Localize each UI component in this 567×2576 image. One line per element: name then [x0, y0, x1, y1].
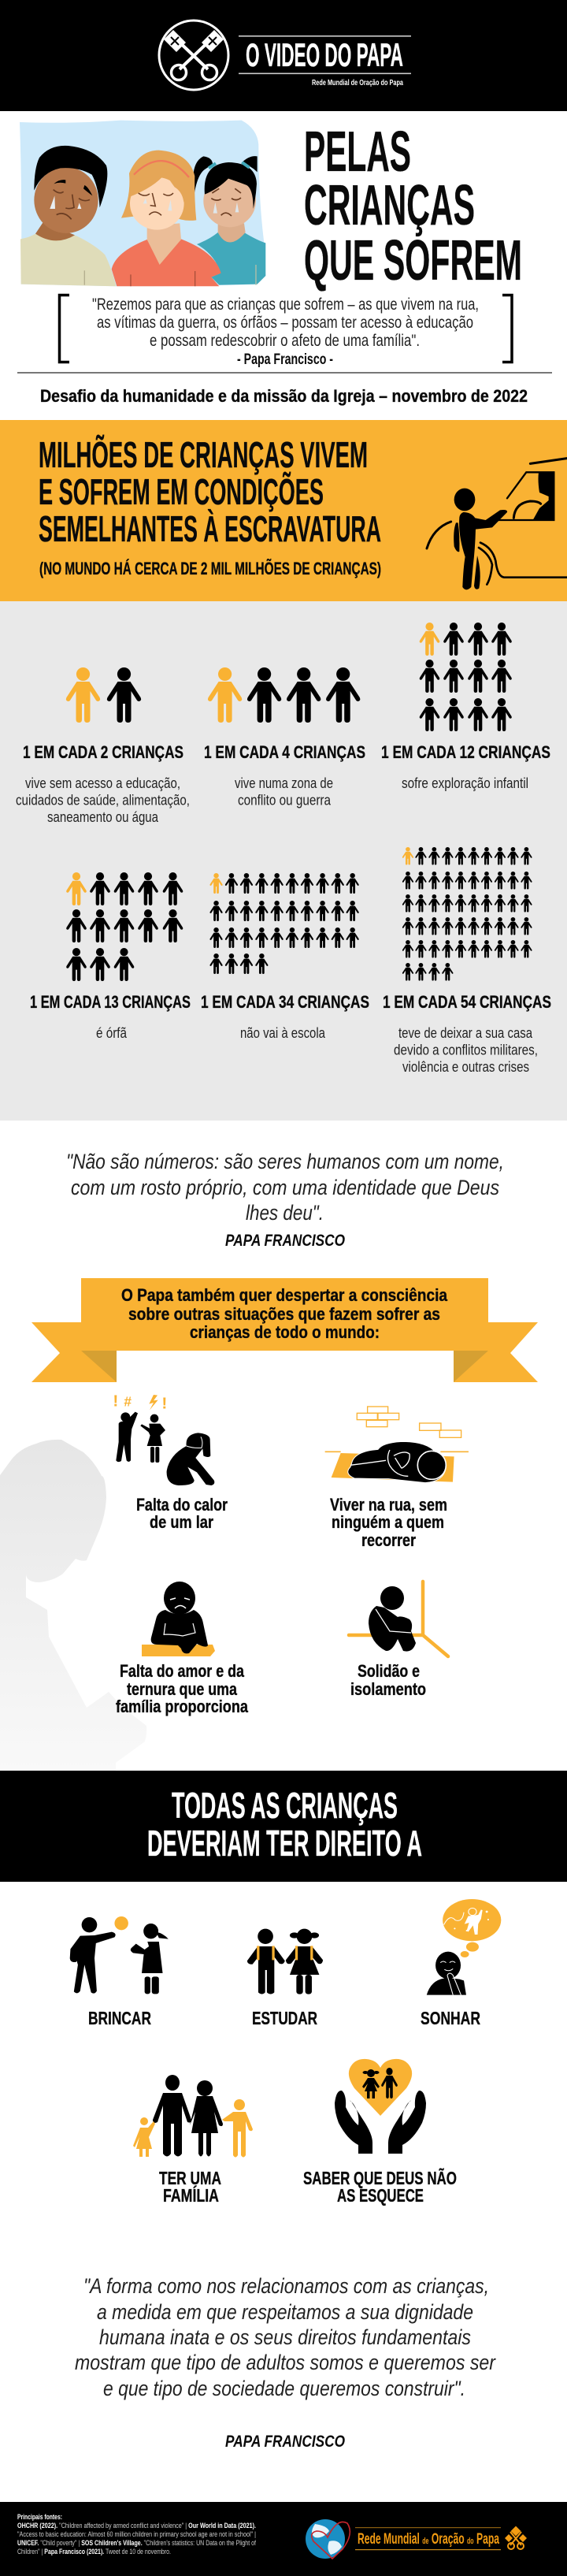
- stat: 1 in 4: [204, 667, 365, 808]
- heading: millions of children: E SOFREM EM CONDIÇÕES: [39, 471, 324, 512]
- prayer quote in brackets: - Papa Francisco -: [237, 351, 333, 368]
- pictogram: 34 children: [209, 873, 359, 974]
- illustration: three crying children: [20, 121, 265, 286]
- prayer quote in brackets: e possam redescobrir o afeto de uma família".: [150, 331, 420, 350]
- stat: 1 in 13: [30, 872, 191, 1041]
- right: dream: [421, 1899, 501, 2028]
- right: know God does not forget: SABER QUE DEUS NÃO: [303, 2167, 457, 2188]
- silhouette of the Pope: [0, 1440, 146, 1771]
- item: living on the street: Viver na rua, sem: [330, 1495, 447, 1515]
- icon: globe with heart: [306, 2519, 350, 2559]
- logo wordmark: [239, 35, 411, 87]
- icon: children with ball: [70, 1916, 169, 1994]
- closing quote: a medida em que respeitamos a sua dignidade: [97, 2300, 473, 2324]
- closing quote: humana inata e os seus direitos fundamentais: [99, 2325, 471, 2349]
- item: lack of family love: Falta do amor e da: [120, 1661, 245, 1681]
- stat: 1 in 2: vive sem acesso a educação,: [25, 775, 180, 791]
- prayer quote in brackets: [60, 295, 512, 368]
- icon: small keys: [505, 2527, 527, 2549]
- item: lack of family love: [116, 1582, 249, 1716]
- right: play: [70, 1916, 169, 2028]
- stat: 1 in 4: conflito ou guerra: [238, 791, 332, 808]
- sources: "Access to basic education: Almost 60 million children in primary school age are not in school" |: [17, 2530, 256, 2538]
- item: lack of home warmth: de um lar: [150, 1512, 213, 1532]
- right: family: TER UMA: [159, 2168, 221, 2188]
- panel: rights heading: [0, 1771, 567, 1882]
- icon: crossed keys logo: [159, 20, 228, 90]
- stat: 1 in 4: vive numa zona de: [235, 775, 333, 791]
- pictogram: 2 children: [66, 667, 141, 723]
- right: dream: SONHAR: [421, 2008, 480, 2028]
- sources: OHCHR (2022). "Children affected by armed conflict and violence" | Our World in Data (2021).: [17, 2522, 256, 2530]
- item: living on the street: [325, 1407, 469, 1550]
- panel: grey statistics: [0, 601, 567, 1121]
- closing quote: "A forma como nos relacionamos com as crianças,: [83, 2274, 489, 2298]
- sources: Principais fontes:: [17, 2513, 62, 2521]
- closing quote: [75, 2274, 496, 2451]
- icon: family holding hands: [133, 2075, 253, 2158]
- icon: arguing parents and child: [113, 1392, 214, 1485]
- sources: [17, 2513, 256, 2556]
- logo wordmark: Rede Mundial de Oração do Papa: [312, 79, 403, 87]
- network wordmark: Rede Mundial de Oração do Papa: [358, 2531, 499, 2548]
- sources: Children" | Papa Francisco (2021). Tweet de 10 de novembro.: [17, 2548, 171, 2556]
- stat: 1 in 54: violência e outras crises: [402, 1058, 529, 1075]
- stat: 1 in 12: [381, 623, 550, 791]
- stat: 1 in 54: devido a conflitos militares,: [394, 1042, 538, 1058]
- header band: [0, 0, 567, 111]
- banner: O Papa também quer despertar a consciência: [121, 1285, 448, 1305]
- right: play: BRINCAR: [88, 2008, 151, 2028]
- heading: millions of children: [39, 434, 381, 549]
- banner: crianças de todo o mundo:: [190, 1322, 380, 1342]
- right: study: [247, 1929, 323, 2028]
- item: lack of home warmth: [113, 1392, 228, 1532]
- right: study: ESTUDAR: [252, 2008, 317, 2028]
- icon: arguing parents and child: !: [113, 1392, 118, 1411]
- right: family: FAMÍLIA: [163, 2184, 219, 2206]
- icon: arguing parents and child: #: [124, 1394, 132, 1410]
- stat: 1 in 54: teve de deixar a sua casa: [398, 1024, 533, 1041]
- stat: 1 in 34: 1 EM CADA 34 CRIANÇAS: [201, 992, 369, 1012]
- logo wordmark: O VIDEO DO PAPA: [246, 36, 403, 73]
- closing quote: PAPA FRANCISCO: [225, 2433, 345, 2451]
- item: lack of family love: ternura que uma: [127, 1679, 238, 1699]
- stat: 1 in 13: 1 EM CADA 13 CRIANÇAS: [30, 992, 191, 1012]
- icon: child at car window: [427, 459, 567, 589]
- stat: 1 in 2: 1 EM CADA 2 CRIANÇAS: [23, 742, 183, 762]
- stat: 1 in 34: não vai à escola: [240, 1024, 326, 1041]
- right: know God does not forget: [303, 2059, 457, 2206]
- footer: [0, 2502, 567, 2576]
- icon: child sleeping on street: [325, 1407, 469, 1483]
- icon: child dreaming of astronaut: [427, 1899, 501, 1995]
- quote: not numbers: [66, 1150, 504, 1250]
- item: lack of family love: família proporciona: [116, 1697, 249, 1716]
- stat: 1 in 54: [383, 847, 551, 1075]
- divider: [17, 372, 552, 374]
- banner: sobre outras situações que fazem sofrer as: [128, 1304, 440, 1324]
- icon: child alone in corner: [349, 1582, 448, 1656]
- item: lack of home warmth: Falta do calor: [136, 1495, 228, 1515]
- item: loneliness: isolamento: [350, 1679, 426, 1699]
- sources: UNICEF. "Child poverty" | SOS Children's Village. "Children's statistics: UN Data on the Plight of: [17, 2539, 256, 2547]
- stat: 1 in 2: [16, 667, 190, 825]
- pictogram: 12 children: [420, 623, 512, 731]
- icon: arguing parents and child: !: [161, 1394, 167, 1412]
- stat: 1 in 34: [201, 873, 369, 1041]
- stat: 1 in 4: 1 EM CADA 4 CRIANÇAS: [204, 742, 365, 762]
- closing quote: e que tipo de sociedade queremos construir".: [103, 2377, 465, 2400]
- title: [304, 121, 522, 292]
- item: living on the street: recorrer: [361, 1530, 416, 1550]
- stat: 1 in 13: é órfã: [96, 1024, 128, 1041]
- subheading: (NO MUNDO HÁ CERCA DE 2 MIL MILHÕES DE CRIANÇAS): [39, 559, 381, 578]
- closing quote: mostram que tipo de adultos somos e queremos ser: [75, 2351, 496, 2374]
- icon: hands holding heart with children: [335, 2059, 426, 2154]
- right: family: [133, 2075, 253, 2206]
- panel: orange headline: [0, 420, 567, 601]
- icon: children with backpacks: [247, 1929, 323, 1994]
- item: loneliness: [349, 1582, 448, 1699]
- banner: [32, 1278, 538, 1382]
- item: living on the street: ninguém a quem: [332, 1512, 444, 1532]
- pictogram: 54 children: [402, 847, 532, 980]
- stat: 1 in 2: cuidados de saúde, alimentação,: [16, 791, 190, 808]
- right: know God does not forget: AS ESQUECE: [337, 2185, 424, 2206]
- quote: not numbers: lhes deu".: [246, 1201, 324, 1225]
- panel: rights heading: TODAS AS CRIANÇAS: [172, 1785, 398, 1826]
- stat: 1 in 2: saneamento ou água: [47, 808, 159, 825]
- icon: sad child at table: [142, 1582, 215, 1656]
- pictogram: 13 children: [66, 872, 183, 981]
- stat: 1 in 12: sofre exploração infantil: [402, 775, 528, 791]
- pictogram: 4 children: [208, 667, 360, 723]
- quote: not numbers: PAPA FRANCISCO: [225, 1232, 345, 1250]
- title: PELAS: [304, 121, 411, 184]
- quote: not numbers: com um rosto próprio, com uma identidade que Deus: [71, 1176, 499, 1199]
- item: loneliness: Solidão e: [358, 1661, 420, 1681]
